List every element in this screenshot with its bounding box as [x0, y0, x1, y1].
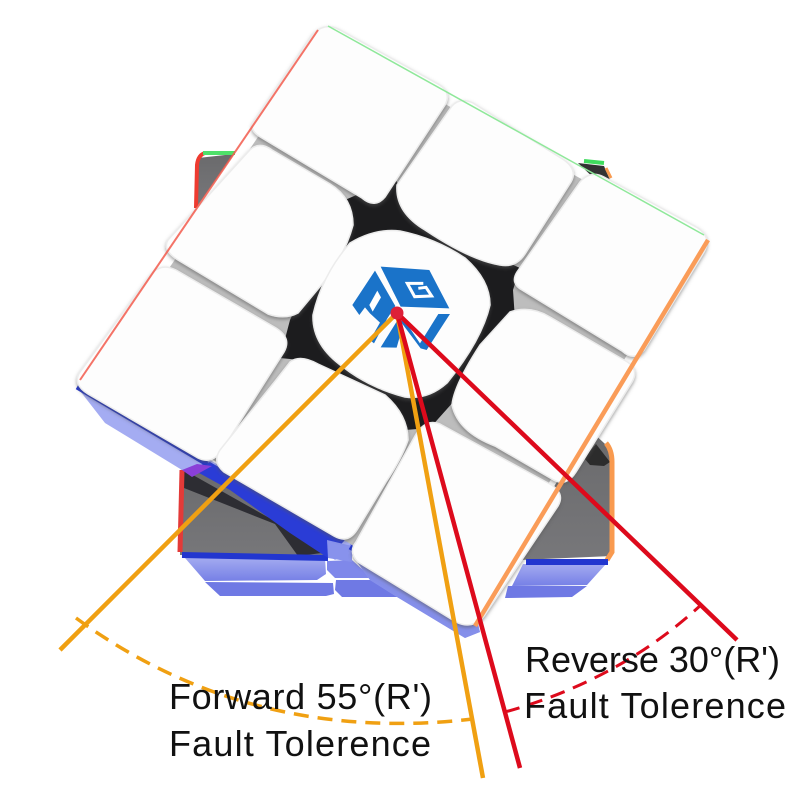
text: reverse label: Reverse 30°(R'): [525, 639, 780, 680]
sticker: top corner: [252, 27, 447, 203]
sticker: center: [313, 230, 490, 397]
red reverse fault-tolerance lines: [397, 313, 737, 768]
forward arc (dashed): [76, 618, 473, 723]
icon: GAN logo: [352, 267, 450, 350]
orange forward fault-tolerance lines: [60, 313, 483, 778]
top layer side strips: [77, 387, 480, 638]
sticker: bottom corner: [352, 422, 560, 625]
text: reverse label: [524, 639, 786, 726]
top face base plate: [90, 38, 696, 612]
pivot point: [390, 306, 404, 320]
sticker: right edge: [452, 309, 635, 482]
text: reverse label: Fault Tolerence: [524, 685, 786, 726]
side edge trims: [80, 26, 708, 626]
sticker: left edge: [166, 145, 353, 317]
sticker: bottom edge: [217, 358, 408, 539]
lower-left grey face: [180, 465, 340, 558]
text: forward label: Forward 55°(R'): [169, 676, 432, 717]
lower-right grey face: [520, 430, 612, 560]
sticker: right corner: [514, 174, 707, 356]
reverse arc (dashed): [505, 604, 702, 712]
sticker: top edge: [397, 101, 573, 266]
sticker: left corner: [77, 267, 287, 460]
upper-left back corner: [196, 153, 235, 208]
lower-left blue strips: [182, 555, 398, 597]
text: forward label: Fault Tolerence: [169, 723, 431, 764]
lower-right blue strips: [505, 562, 608, 598]
text: forward label: [169, 676, 432, 764]
cube core gaps: [280, 178, 520, 430]
lower cube layers: [180, 153, 612, 598]
upper-right back corner: [578, 161, 611, 184]
top face stickers: [77, 27, 707, 625]
